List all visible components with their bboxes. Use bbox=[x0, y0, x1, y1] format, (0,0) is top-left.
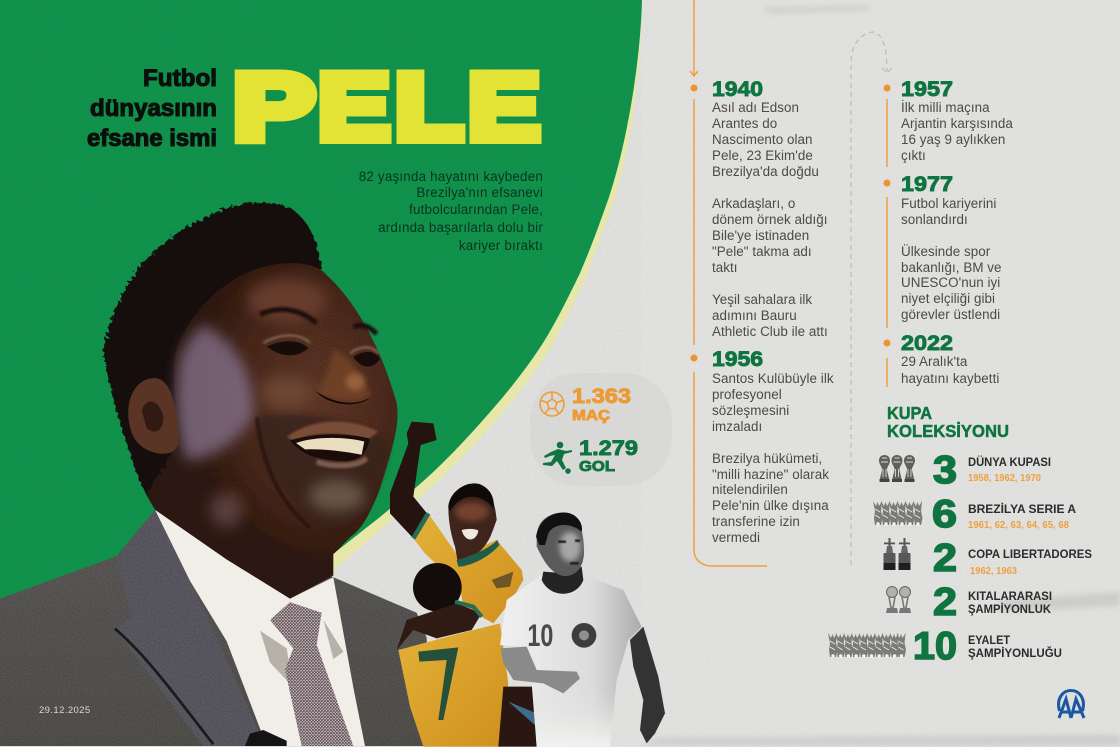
teeth bbox=[296, 438, 364, 455]
title: Futbol dünyasının efsane ismi: Futbol bbox=[143, 65, 217, 92]
teammate head bbox=[413, 563, 462, 612]
hair bbox=[103, 203, 322, 496]
photo: smiling portrait of Pele bbox=[0, 203, 430, 746]
forearm and hand bbox=[501, 647, 580, 693]
intro text: kariyer bıraktı bbox=[459, 238, 543, 253]
timeline entry: 1956: "milli hazine" olarak bbox=[712, 467, 829, 482]
trophy row: World Cup bbox=[879, 449, 1051, 492]
timeline entry: 2022: hayatını kaybetti bbox=[901, 371, 999, 386]
green header shape bbox=[0, 0, 642, 610]
icon: footballer bbox=[543, 442, 572, 474]
trophy row: Copa Libertadores bbox=[884, 537, 1092, 580]
heading: trophy collection: KUPA bbox=[887, 403, 932, 423]
icon: two intercontinental trophies bbox=[886, 586, 911, 613]
timeline entry: 1956: sözleşmesini bbox=[712, 403, 789, 418]
timeline entry: 1956: vermedi bbox=[712, 530, 760, 545]
jersey fade bbox=[533, 687, 617, 747]
left lapel bbox=[115, 510, 266, 746]
trophy row: Copa Libertadores: COPA LIBERTADORES bbox=[968, 547, 1092, 561]
trophy row: State championship: 10 bbox=[913, 625, 957, 668]
cheek light bbox=[260, 375, 313, 410]
heading: trophy collection bbox=[887, 403, 1009, 441]
goals stat: 1.279 bbox=[579, 437, 638, 460]
head bbox=[174, 263, 398, 560]
trophy row: Intercontinental bbox=[886, 581, 1052, 624]
timeline entry: 1977: niyet elçiliği gibi bbox=[901, 291, 995, 306]
timeline entry: 1940: Yeşil sahalara ilk bbox=[712, 292, 812, 307]
trophy row: Intercontinental: KITALARARASI bbox=[968, 589, 1052, 603]
icon: three World Cup trophies bbox=[879, 455, 915, 482]
title: PELE: E bbox=[468, 54, 540, 159]
timeline entry: 1940: adımını Bauru bbox=[712, 308, 797, 323]
intro text: Brezilya'nın efsanevi bbox=[416, 185, 543, 200]
trophy row: State championship bbox=[828, 625, 1062, 668]
ear bbox=[128, 378, 178, 454]
timeline: left orange line bbox=[690, 0, 887, 566]
brows bbox=[260, 310, 377, 334]
neck highlight bbox=[210, 492, 243, 528]
nose tip shine bbox=[346, 373, 364, 390]
timeline entry: 1957: Arjantin karşısında bbox=[901, 116, 1013, 131]
date stamp: 29.12.2025 bbox=[39, 705, 91, 716]
suit jacket bbox=[0, 510, 430, 746]
timeline: dashed connector bbox=[851, 32, 892, 565]
timeline entry: 2022 bbox=[901, 332, 999, 386]
right arm bbox=[630, 627, 665, 743]
legs bbox=[498, 687, 537, 747]
goals stat bbox=[579, 437, 638, 475]
timeline entry: 1940: Arantes do bbox=[712, 116, 777, 131]
title: PELE: E bbox=[318, 54, 390, 159]
icon: ten state trophies bbox=[828, 633, 906, 658]
heading: trophy collection: KOLEKSİYONU bbox=[887, 421, 1009, 441]
timeline entry: 1940: Athletic Club ile attı bbox=[712, 324, 828, 339]
timeline entry: 1956: transferine izin bbox=[712, 514, 800, 529]
trophy row: Serie A: 1961, 62, 63, 64, 65, 68 bbox=[968, 519, 1069, 531]
timeline entry: 1977: bakanlığı, BM ve bbox=[901, 260, 1002, 275]
timeline entry: 1977: sonlandırdı bbox=[901, 212, 968, 227]
title: Futbol dünyasının efsane ismi: dünyasının bbox=[90, 95, 217, 122]
stats panel bbox=[530, 373, 672, 486]
timeline entry: 2022: 29 Aralık'ta bbox=[901, 354, 968, 369]
timeline entry: 1940: Nascimento olan bbox=[712, 132, 812, 147]
timeline entry: 1956 bbox=[712, 348, 834, 545]
trophy row: World Cup: 3 bbox=[933, 449, 957, 492]
goals stat: GOL bbox=[579, 458, 615, 475]
nose bbox=[317, 350, 370, 402]
matches stat: 1.363 bbox=[572, 385, 631, 408]
intro text: futbolcularından Pele, bbox=[409, 202, 543, 217]
timeline entry: 1977: UNESCO'nun iyi bbox=[901, 275, 1000, 290]
timeline entry: 1957: İlk milli maçına bbox=[901, 100, 990, 115]
collar shadow bbox=[260, 620, 343, 687]
title: Futbol dünyasının efsane ismi bbox=[87, 65, 217, 152]
head bbox=[448, 484, 497, 565]
panel background bbox=[530, 373, 672, 486]
photo: Pele celebrating in yellow jersey bbox=[390, 422, 537, 747]
timeline entry: 1940: taktı bbox=[712, 260, 738, 275]
timeline: orange dots bbox=[690, 84, 890, 362]
trophy row: Copa Libertadores: 1962, 1963 bbox=[970, 565, 1017, 577]
forehead light bbox=[247, 279, 327, 321]
trophy row: State championship: ŞAMPİYONLUĞU bbox=[968, 645, 1062, 660]
matches stat bbox=[572, 385, 631, 424]
timeline entry: 1957: çıktı bbox=[901, 148, 926, 163]
timeline entry: 1956: Brezilya hükümeti, bbox=[712, 451, 822, 466]
head bbox=[537, 513, 584, 576]
number 10: 10 bbox=[527, 617, 553, 653]
embracing arm bbox=[397, 603, 482, 650]
lapel slit bbox=[115, 629, 213, 744]
timeline entry: 1956: Santos Kulübüyle ilk bbox=[712, 371, 834, 386]
timeline entry: 1977: Ülkesinde spor bbox=[901, 244, 991, 259]
timeline entry: 1940 bbox=[712, 78, 828, 339]
trophy row: World Cup: 1958, 1962, 1970 bbox=[968, 472, 1041, 484]
neck bbox=[143, 432, 333, 599]
intro text: ardında başarılarla dolu bir bbox=[378, 220, 543, 235]
timeline entry: 1940: Bile'ye istinaden bbox=[712, 228, 809, 243]
icon: two Libertadores trophies bbox=[884, 538, 910, 570]
matches stat: MAÇ bbox=[572, 407, 610, 424]
timeline entry: 1977: görevler üstlendi bbox=[901, 307, 1000, 322]
timeline entry: 1956: Pele'nin ülke dışına bbox=[712, 498, 829, 513]
yellow band under green shape bbox=[0, 0, 642, 620]
jaw crease bbox=[257, 417, 310, 528]
timeline entry: 1940: Pele, 23 Ekim'de bbox=[712, 148, 813, 163]
timeline entry: 1957: 16 yaş 9 aylıkken bbox=[901, 132, 1005, 147]
trophy row: Copa Libertadores: 2 bbox=[933, 537, 957, 580]
icon: six league trophies bbox=[873, 501, 922, 526]
raised arm bbox=[390, 422, 437, 538]
title: PELE: P bbox=[233, 54, 315, 159]
timeline entry: 1957 bbox=[901, 78, 1013, 163]
icon: football bbox=[540, 392, 564, 416]
microphone bbox=[245, 730, 287, 746]
stubble shadow bbox=[257, 415, 390, 528]
trophy row: Serie A: BREZİLYA SERIE A bbox=[968, 501, 1076, 516]
nose underside bbox=[315, 391, 370, 404]
trophy row: Serie A: 6 bbox=[932, 493, 957, 536]
teammate jersey number 7 bbox=[398, 623, 508, 747]
timeline entry: 1956: nitelendirilen bbox=[712, 482, 788, 497]
timeline entry: 1956: 1956 bbox=[712, 348, 763, 371]
temple highlight bbox=[177, 325, 254, 460]
trophy row: State championship: EYALET bbox=[968, 633, 1011, 647]
timeline entry: 1940: "Pele" takma adı bbox=[712, 244, 812, 259]
eyes bbox=[267, 341, 380, 367]
neck and collar bbox=[542, 567, 583, 594]
title: PELE: L bbox=[395, 54, 463, 159]
eye lids bbox=[263, 335, 378, 353]
timeline entry: 1940: dönem örnek aldığı bbox=[712, 212, 828, 227]
mouth bbox=[290, 434, 370, 461]
timeline entry: 2022: 2022 bbox=[901, 332, 953, 355]
lower lip bbox=[317, 458, 367, 465]
timeline entry: 1940: Brezilya'da doğdu bbox=[712, 164, 819, 179]
trophy row: Serie A bbox=[873, 493, 1076, 536]
title: Futbol dünyasının efsane ismi: efsane ismi bbox=[87, 125, 217, 152]
intro text: 82 yaşında hayatını kaybeden bbox=[359, 169, 543, 184]
timeline entry: 1977: 1977 bbox=[901, 173, 953, 196]
upper lip bbox=[287, 422, 378, 440]
timeline entry: 1940: Asıl adı Edson bbox=[712, 100, 799, 115]
eyes and mouth bbox=[558, 541, 580, 563]
timeline entry: 1977: Futbol kariyerini bbox=[901, 196, 996, 211]
shirt bbox=[155, 510, 365, 746]
timeline entry: 1956: imzaladı bbox=[712, 419, 762, 434]
chin highlight bbox=[308, 480, 365, 512]
intro text bbox=[359, 169, 543, 253]
photo: Pele in white number 10 jersey bbox=[500, 513, 665, 747]
icon: Anadolu Agency logo bbox=[1059, 690, 1084, 718]
trophy row: Intercontinental: 2 bbox=[933, 581, 957, 624]
yellow jersey bbox=[413, 513, 523, 623]
team crest bbox=[572, 623, 596, 648]
necktie bbox=[270, 602, 353, 746]
white jersey bbox=[500, 573, 642, 747]
timeline entry: 1940: 1940 bbox=[712, 78, 763, 101]
face highlights bbox=[559, 532, 581, 562]
timeline entry: 1940: Arkadaşları, o bbox=[712, 196, 795, 211]
trophy row: World Cup: DÜNYA KUPASI bbox=[968, 454, 1051, 469]
timeline entry: 1957: 1957 bbox=[901, 78, 953, 101]
timeline entry: 1956: profesyonel bbox=[712, 387, 782, 402]
trophy row: Intercontinental: ŞAMPİYONLUK bbox=[968, 601, 1051, 616]
timeline entry: 1977 bbox=[901, 173, 1002, 322]
